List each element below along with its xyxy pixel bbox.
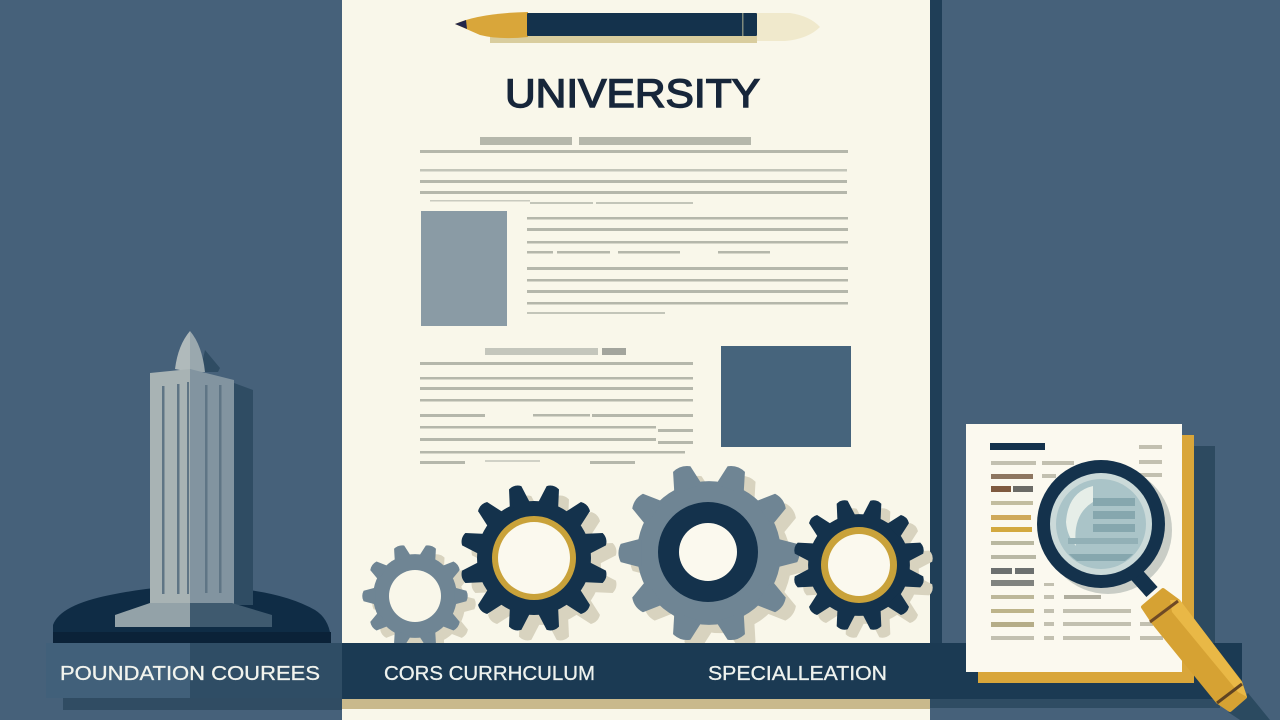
icon: document under magnifier xyxy=(966,424,1215,683)
gear shadows xyxy=(372,472,935,656)
label: foundation courses: POUNDATION COUREES xyxy=(60,663,320,685)
title: UNIVERSITY xyxy=(505,72,760,116)
text block: upper section lines xyxy=(420,137,848,314)
image placeholder: blue block xyxy=(721,346,851,447)
text block: lower section lines xyxy=(420,348,693,464)
image placeholder: grey block xyxy=(421,211,507,326)
label: core curriculum: CORS CURRHCULUM xyxy=(384,663,595,685)
icon: pencil xyxy=(455,12,820,43)
icon: small grey gear xyxy=(362,543,468,649)
icon: right navy gear with gold ring xyxy=(792,498,926,632)
paper sheet shadow xyxy=(930,0,942,643)
icon: tower monument xyxy=(53,331,331,643)
icon: magnifying glass xyxy=(1037,460,1270,720)
panel: university paper sheet xyxy=(342,0,930,720)
icon: large grey gear with navy ring xyxy=(618,462,800,644)
label band: shadow strips xyxy=(63,697,1220,710)
label: specialization: SPECIALLEATION xyxy=(708,663,887,685)
label band xyxy=(46,643,1242,699)
icon: navy gear with gold ring xyxy=(459,483,609,633)
